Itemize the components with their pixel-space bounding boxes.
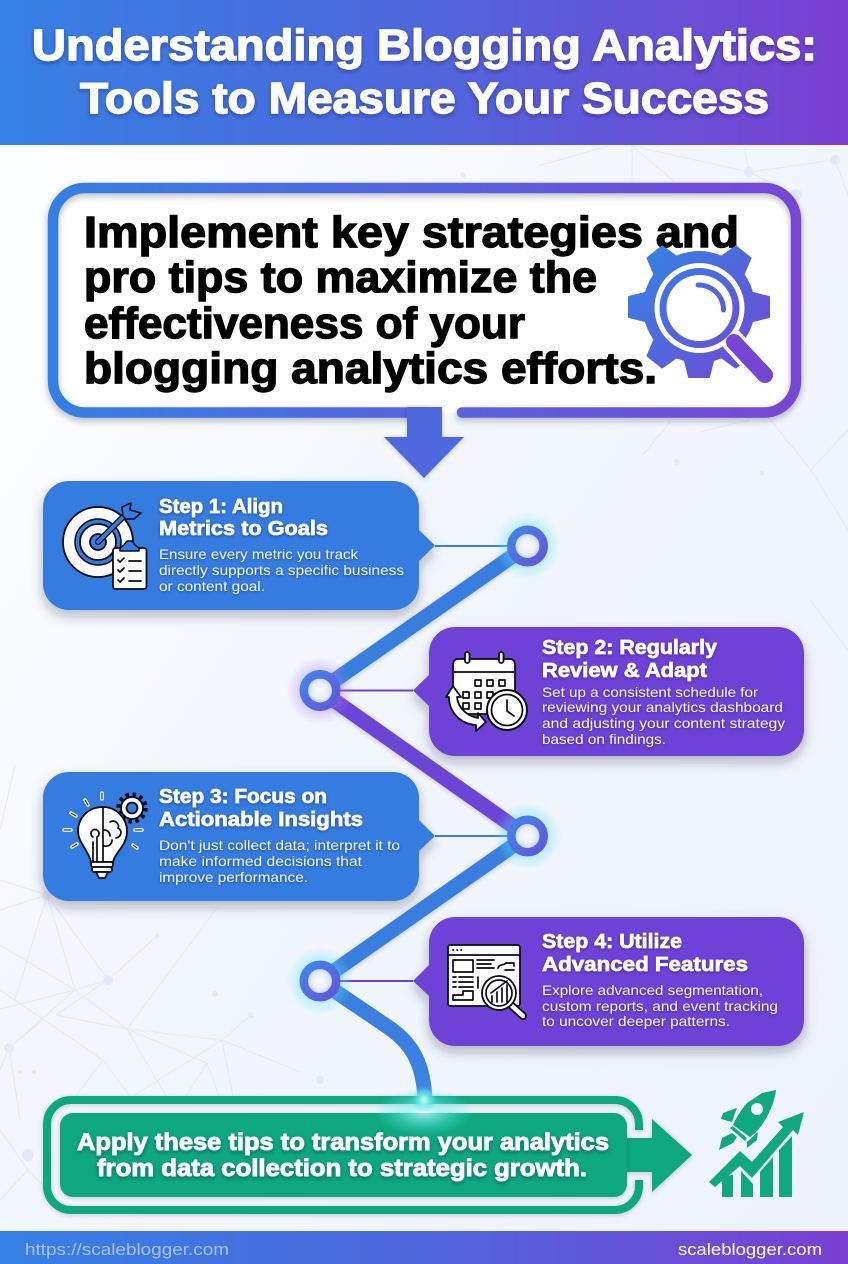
step 2 text: based on findings. — [542, 731, 666, 747]
step 4 text — [542, 982, 778, 1029]
step 1 text: directly supports a specific business — [159, 562, 404, 578]
intro text: pro tips to maximize the — [84, 253, 597, 302]
step 2 text: Set up a consistent schedule for — [542, 684, 758, 700]
icon: dashboard with magnifier — [448, 945, 523, 1016]
conclusion text: from data collection to strategic growth. — [97, 1155, 587, 1182]
step 3 heading — [159, 786, 363, 831]
node 1 — [494, 512, 562, 580]
step 2 text: reviewing your analytics dashboard — [542, 699, 783, 715]
panel: intro callout — [53, 188, 796, 478]
conclusion text — [77, 1129, 609, 1182]
panel: step 4 — [413, 917, 804, 1046]
path segment: node 3 to 4 — [320, 836, 527, 981]
step 4 text: to uncover deeper patterns. — [542, 1013, 730, 1029]
step 4 heading: Advanced Features — [542, 954, 748, 976]
node 2 — [286, 656, 354, 724]
header band — [0, 0, 848, 145]
intro text — [84, 208, 739, 393]
step 2 text — [542, 684, 785, 747]
footer url right: scaleblogger.com — [678, 1240, 822, 1259]
title: Understanding Blogging Analytics: — [32, 21, 817, 70]
inner green panel — [60, 1113, 627, 1197]
step 1 text: Ensure every metric you track — [159, 546, 359, 562]
icon: gear with magnifier — [629, 246, 769, 377]
path segment: node 4 to conclusion — [320, 981, 425, 1105]
path segment: node 2 to 3 — [320, 690, 527, 836]
footer url left: https://scaleblogger.com — [25, 1240, 229, 1259]
panel: step 2 — [413, 627, 804, 756]
intro text: blogging analytics efforts. — [84, 344, 657, 393]
step 3 text — [159, 837, 400, 885]
step 4 text: custom reports, and event tracking — [542, 998, 778, 1014]
panel: step 1 — [43, 481, 435, 610]
process path — [286, 512, 562, 1105]
title: Tools to Measure Your Success — [80, 74, 769, 123]
conclusion text: Apply these tips to transform your analytics — [77, 1129, 609, 1156]
arrow: down from callout — [384, 407, 464, 478]
step 4 text: Explore advanced segmentation, — [542, 982, 763, 998]
step 1 text: or content goal. — [159, 578, 265, 594]
title — [32, 21, 817, 123]
step 1 text — [159, 546, 404, 594]
node 4 — [286, 947, 354, 1015]
step 4 heading — [542, 931, 748, 976]
step 2 heading — [542, 637, 718, 682]
path segment: node 1 to 2 — [320, 546, 527, 690]
icon: rocket and growth chart — [709, 1090, 804, 1197]
node 3 — [494, 802, 562, 870]
step 3 text: Don't just collect data; interpret it to — [159, 837, 400, 853]
step 3 heading: Actionable Insights — [159, 809, 363, 831]
step 2 heading: Step 2: Regularly — [542, 637, 718, 659]
footer band — [0, 1231, 848, 1264]
connector: step 2 — [320, 690, 413, 692]
callout border — [53, 188, 796, 412]
intro text: effectiveness of your — [84, 299, 525, 348]
intro text: Implement key strategies and — [84, 208, 739, 257]
icon: lightbulb brain and gear — [64, 793, 146, 878]
step 1 heading: Metrics to Goals — [159, 518, 328, 540]
step 3 heading: Step 3: Focus on — [159, 786, 327, 808]
step 1 heading: Step 1: Align — [159, 496, 283, 518]
step 2 text: and adjusting your content strategy — [542, 715, 785, 731]
icon: calendar and clock — [446, 652, 527, 731]
panel: conclusion — [47, 1087, 692, 1210]
outer green band — [47, 1100, 639, 1210]
glow at path junction — [374, 1087, 474, 1136]
step 3 text: improve performance. — [159, 869, 308, 885]
step 4 heading: Step 4: Utilize — [542, 931, 682, 953]
connector: step 3 — [435, 835, 527, 837]
connector: step 1 — [435, 545, 527, 547]
arrow: conclusion pointer — [620, 1119, 692, 1192]
step 1 heading — [159, 496, 328, 540]
step 3 text: make informed decisions that — [159, 853, 362, 869]
connector: step 4 — [320, 980, 413, 982]
step 2 heading: Review & Adapt — [542, 660, 707, 682]
icon: target and checklist — [63, 503, 146, 589]
panel: step 3 — [43, 772, 435, 901]
